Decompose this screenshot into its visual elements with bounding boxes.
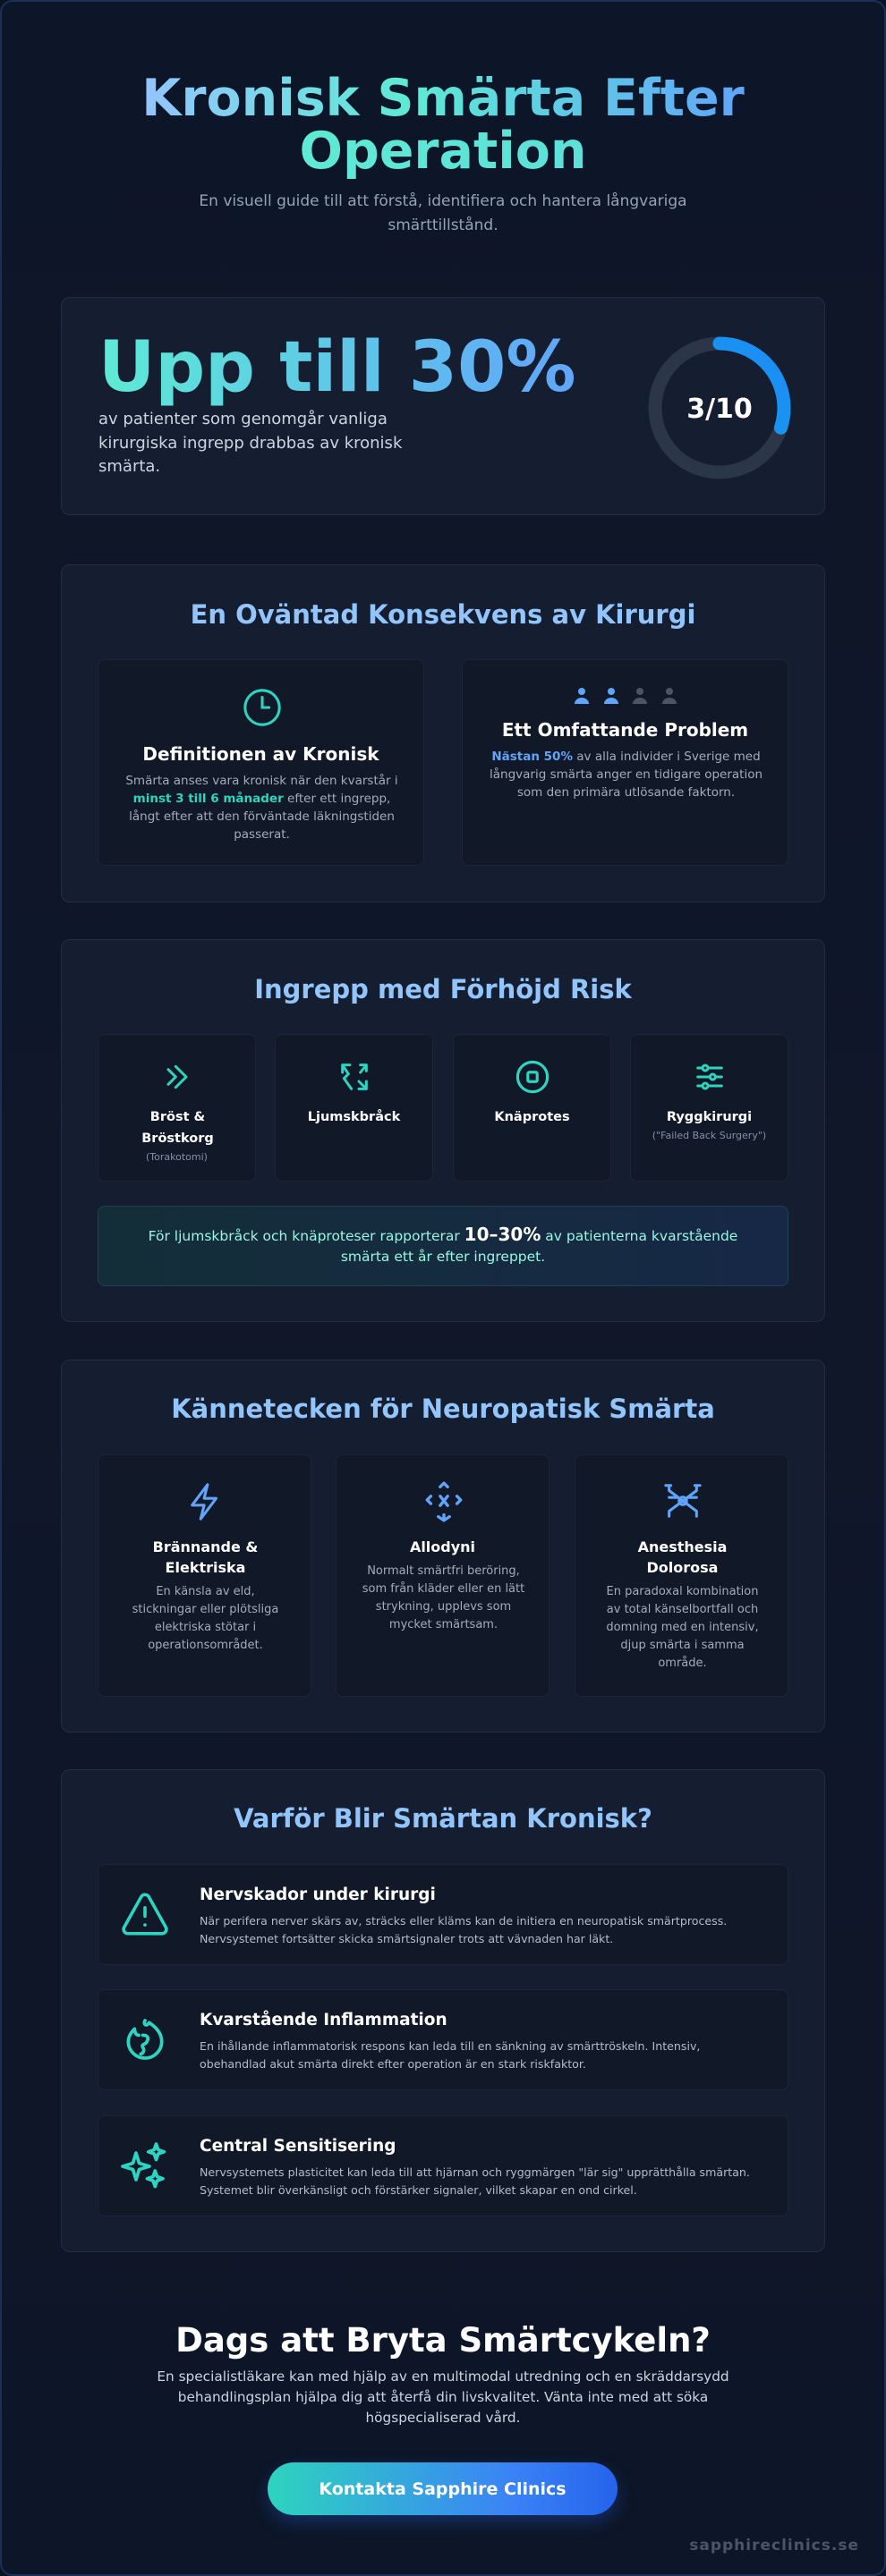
icon: knee <box>515 1061 549 1093</box>
text: En känsla av eld, stickningar eller plötsliga elektriska stötar i operationsområdet. <box>132 1585 278 1652</box>
title: Allodyni <box>410 1538 475 1555</box>
text: Nervsystemets plasticitet kan leda till att hjärnan och ryggmärgen "lär sig" upprätthålla smärtan. Systemet blir överkänsligt och förstärker signaler, vilket skapar en ond cirkel. <box>200 2165 750 2197</box>
card text: Smärta anses vara kronisk när den kvarstår i minst 3 till 6 månader efter ett ingrepp, långt efter att den förväntade läkningstiden passerat. <box>125 774 398 842</box>
card: widespread problem <box>462 659 788 866</box>
title: Kronisk Smärta Efter <box>141 69 745 128</box>
title: Operation <box>299 122 587 181</box>
heading: call to action: Dags att Bryta Smärtcykeln? <box>175 2321 711 2360</box>
title: Kvarstående Inflammation <box>200 2011 447 2029</box>
icon: clock <box>243 689 281 726</box>
button: contact: Kontakta Sapphire Clinics <box>319 2479 567 2499</box>
label: Ryggkirurgi <box>667 1110 752 1124</box>
panel: neuropathic signs <box>61 1360 825 1733</box>
card: definition <box>98 659 424 866</box>
icon: zap <box>191 1483 218 1521</box>
title: Anesthesia Dolorosa <box>638 1538 727 1576</box>
big stat: Upp till 30% <box>98 327 576 408</box>
icon: sliders <box>696 1064 723 1089</box>
text: Normalt smärtfri beröring, som från kläder eller en lätt strykning, upplevs som mycket smärtsam. <box>362 1564 524 1631</box>
title: Brännande & Elektriska <box>153 1538 258 1576</box>
icon: sparkles <box>121 2142 166 2188</box>
icon: arrows <box>341 1063 368 1090</box>
text: En ihållande inflammatorisk respons kan leda till en sänkning av smärttröskeln. Intensiv, obehandlad akut smärta direkt efter operation är en stark riskfaktor. <box>200 2039 700 2071</box>
card: allodynia <box>336 1454 549 1697</box>
callout: groin and knee: För ljumskbråck och knäproteser rapporterar 10–30% av patienterna kvarstående smärta ett år efter ingreppet. <box>149 1224 737 1265</box>
button: contact <box>268 2462 618 2515</box>
text: call to action: En specialistläkare kan med hjälp av en multimodal utredning och en skräddarsydd behandlingsplan hjälpa dig att återfå din livskvalitet. Vänta inte med att söka högspecialiserad vård. <box>157 2368 729 2426</box>
icon: warning triangle <box>122 1893 168 1936</box>
card: burning <box>98 1454 311 1697</box>
sublabel: (Torakotomi) <box>146 1151 208 1163</box>
footer: website: sapphireclinics.se <box>689 2537 859 2555</box>
icon: allodynia <box>426 1481 462 1522</box>
label: Bröst & Bröstkorg <box>141 1110 214 1146</box>
card: knee <box>453 1034 611 1182</box>
row: central sensitisation <box>98 2115 788 2216</box>
text: När perifera nerver skärs av, sträcks eller kläms kan de initiera en neuropatisk smärtprocess. Nervsystemet fortsätter skicka smärtsignaler trots att vävnaden har läkt. <box>200 1914 727 1945</box>
callout: groin and knee <box>98 1206 788 1286</box>
panel: unexpected consequence <box>61 564 825 902</box>
icon: chevrons <box>166 1064 188 1089</box>
donut chart 3/10: 3/10 <box>686 394 753 425</box>
label: Ljumskbråck <box>308 1110 400 1124</box>
heading: neuropathic: Kännetecken för Neuropatisk Smärta <box>171 1394 715 1424</box>
title: Central Sensitisering <box>200 2137 396 2156</box>
text: En paradoxal kombination av total känselbortfall och domning med en intensiv, djup smärta i samma område. <box>606 1585 759 1670</box>
subtitle: En visuell guide till att förstå, identifiera och hantera långvariga smärttillstånd. <box>199 192 687 234</box>
sublabel: ("Failed Back Surgery") <box>652 1130 766 1141</box>
title <box>141 69 745 181</box>
icon: people <box>575 688 677 704</box>
stat description: av patienter som genomgår vanliga kirurgiska ingrepp drabbas av kronisk smärta. <box>98 410 402 476</box>
icon: flame <box>127 2019 163 2060</box>
title: Nervskador under kirurgi <box>200 1885 436 1904</box>
card text: Nästan 50% av alla individer i Sverige med långvarig smärta anger en tidigare operation som den primära utlösande faktorn. <box>490 750 762 800</box>
card: chest <box>98 1034 256 1182</box>
row: nerve damage <box>98 1864 788 1965</box>
icon: nodes <box>664 1484 702 1518</box>
label: Knäprotes <box>494 1110 570 1124</box>
heading: why chronic: Varför Blir Smärtan Kronisk? <box>234 1803 652 1834</box>
panel: high-risk procedures <box>61 939 825 1322</box>
card: back <box>630 1034 788 1182</box>
panel: stat <box>61 297 825 515</box>
row: inflammation <box>98 1989 788 2090</box>
donut chart 3/10 <box>648 336 791 479</box>
heading: consequence: En Oväntad Konsekvens av Kirurgi <box>191 599 695 630</box>
heading: procedures: Ingrepp med Förhöjd Risk <box>254 974 632 1004</box>
panel: why chronic <box>61 1769 825 2252</box>
card: anesthesia dolorosa <box>575 1454 788 1697</box>
card title: Ett Omfattande Problem <box>502 719 748 741</box>
card title: Definitionen av Kronisk <box>142 743 379 765</box>
card: groin <box>275 1034 433 1182</box>
